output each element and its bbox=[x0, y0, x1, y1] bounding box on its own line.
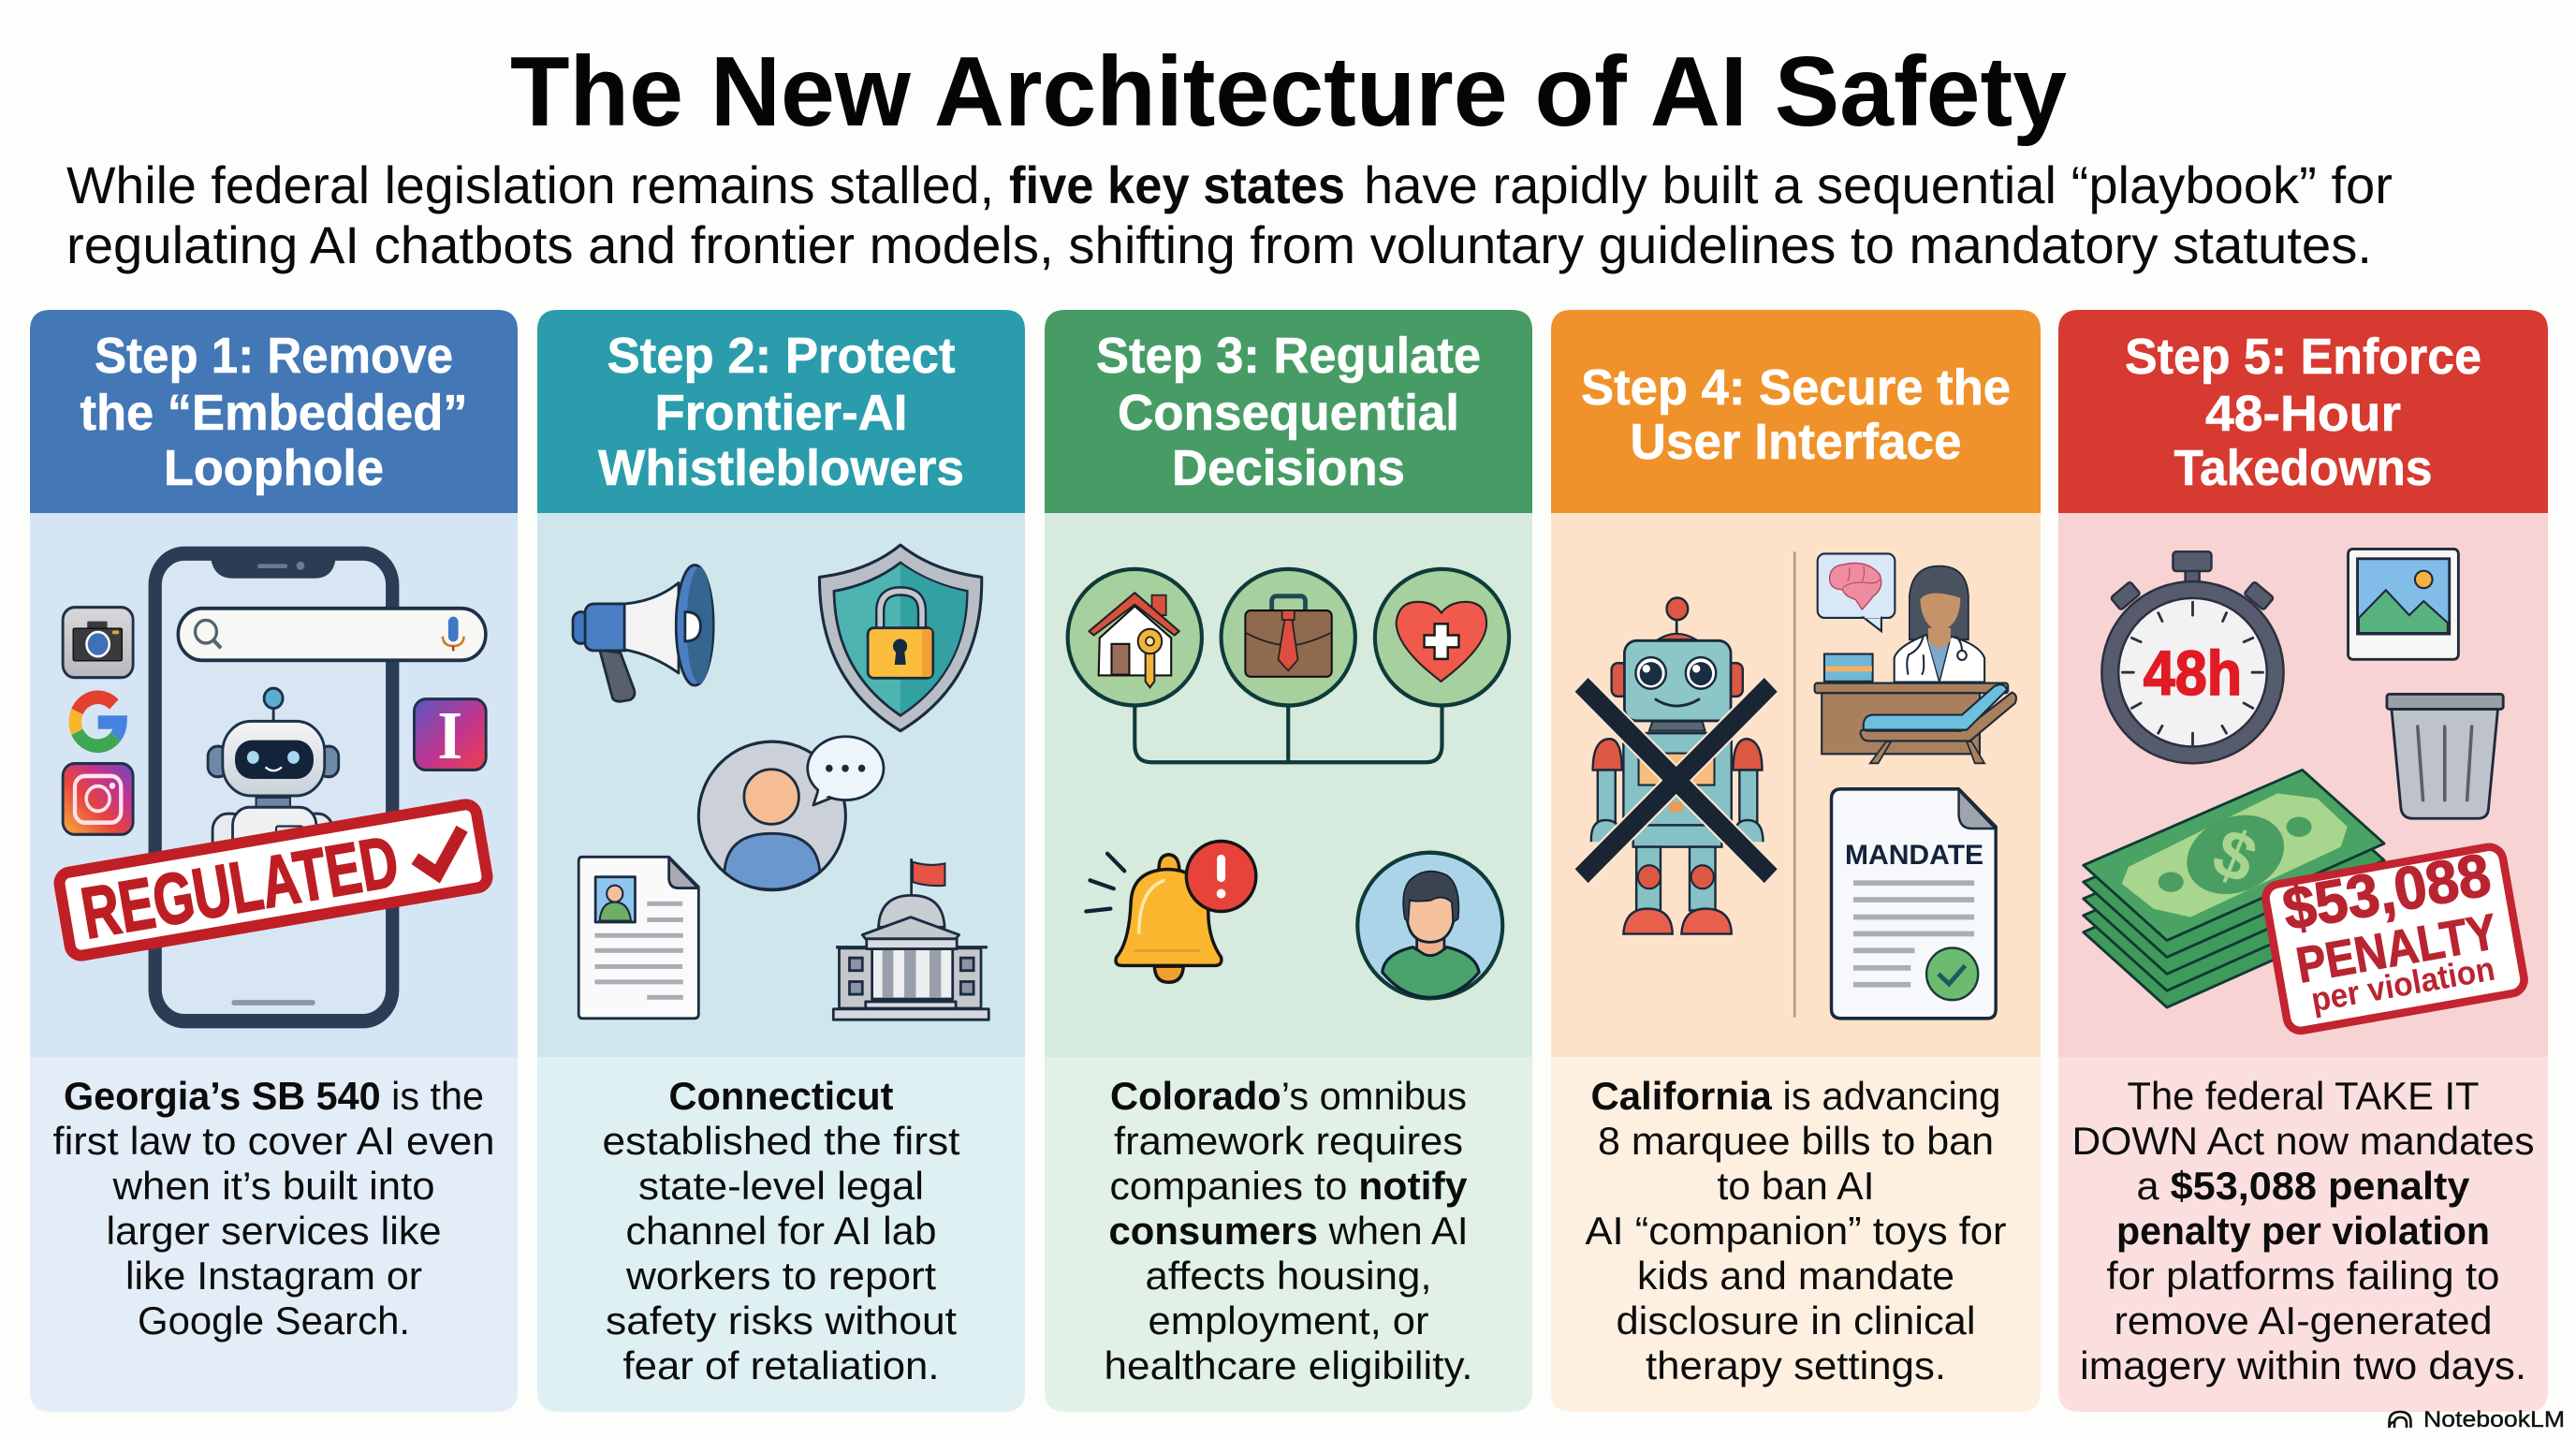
caption: step 5: imagery within two days. bbox=[2080, 1343, 2526, 1387]
caption: step 3: companies to notify bbox=[1110, 1164, 1468, 1208]
caption: step 3 bbox=[1105, 1074, 1473, 1387]
caption: step 1: first law to cover AI even bbox=[52, 1119, 494, 1163]
icon: stack of money bbox=[2084, 770, 2384, 1007]
caption: step 4: California is advancing bbox=[1591, 1074, 2001, 1118]
icon: I app: I bbox=[437, 698, 462, 773]
heading: step 3 bbox=[1096, 328, 1481, 496]
caption: step 5: penalty per violation bbox=[2116, 1209, 2490, 1253]
caption: step 2 bbox=[603, 1074, 960, 1387]
heading: step 2 bbox=[598, 328, 964, 496]
icon: shield with padlock bbox=[819, 545, 982, 731]
heading: step 1 bbox=[80, 328, 468, 496]
caption: step 1: Google Search. bbox=[138, 1299, 410, 1343]
icon: camera app bbox=[63, 608, 133, 678]
caption: step 5: a $53,088 penalty bbox=[2136, 1164, 2470, 1208]
caption: step 5: The federal TAKE IT bbox=[2127, 1074, 2479, 1118]
heading: step 5 bbox=[2125, 329, 2481, 496]
icon: document bbox=[578, 857, 698, 1019]
caption: step 2: Connecticut bbox=[668, 1074, 894, 1118]
illustration: user interface rules bbox=[1582, 551, 2016, 1019]
illustration: phone with embedded chatbot bbox=[63, 553, 486, 1021]
caption: step 2: established the first bbox=[603, 1119, 960, 1163]
caption: step 4 bbox=[1586, 1074, 2007, 1387]
icon: stack of money: $ bbox=[2203, 813, 2267, 899]
heading: step 5: Takedowns bbox=[2174, 440, 2432, 496]
subtitle: have rapidly built a sequential “playbook” for bbox=[1364, 155, 2393, 214]
panel: step 2 bbox=[537, 310, 1025, 1412]
callout: penalty tag bbox=[2262, 838, 2526, 1033]
caption: step 5: DOWN Act now mandates bbox=[2072, 1119, 2535, 1163]
icon: banned companion robot bbox=[1591, 598, 1764, 933]
panel: step 1 bbox=[30, 310, 518, 1412]
caption: step 5 bbox=[2072, 1074, 2535, 1387]
caption: step 4: therapy settings. bbox=[1646, 1343, 1946, 1387]
icon: trash can bbox=[2387, 694, 2503, 818]
panel: step 4 bbox=[1551, 310, 2041, 1412]
heading: step 3: Consequential bbox=[1118, 385, 1459, 441]
heading: step 4: User Interface bbox=[1631, 414, 1962, 470]
icon: employment bbox=[1222, 569, 1355, 706]
title: The New Architecture of AI Safety bbox=[510, 37, 2067, 147]
caption: step 3: framework requires bbox=[1114, 1119, 1463, 1163]
caption: step 1: like Instagram or bbox=[125, 1254, 422, 1298]
icon: megaphone bbox=[573, 565, 713, 701]
caption: step 2: fear of retaliation. bbox=[623, 1343, 940, 1387]
caption: step 1: larger services like bbox=[107, 1209, 442, 1253]
heading: step 3: Decisions bbox=[1172, 440, 1405, 496]
caption: step 2: safety risks without bbox=[606, 1299, 957, 1343]
icon: stopwatch: 48h bbox=[2144, 638, 2242, 709]
icon: chatbot robot bbox=[208, 688, 339, 886]
caption: step 4: 8 marquee bills to ban bbox=[1598, 1119, 1994, 1163]
panel: step 3 bbox=[1045, 310, 1532, 1412]
caption: step 5: remove AI-generated bbox=[2114, 1299, 2492, 1343]
icon: Instagram bbox=[63, 764, 133, 834]
heading: step 4: Step 4: Secure the bbox=[1581, 360, 2011, 416]
heading: step 1: Step 1: Remove bbox=[95, 328, 453, 384]
connector lines bbox=[1134, 705, 1442, 763]
heading: step 4 bbox=[1581, 360, 2011, 470]
icon: stopwatch bbox=[2101, 551, 2284, 763]
icon: mandate document bbox=[1832, 789, 1996, 1019]
icon: X over robot bbox=[1582, 684, 1771, 876]
heading: step 2: Step 2: Protect bbox=[607, 328, 956, 384]
heading: step 1: Loophole bbox=[164, 440, 384, 496]
icon: search bar bbox=[178, 609, 486, 660]
icon: whistleblower person with speech bubble bbox=[698, 737, 884, 890]
subtitle: While federal legislation remains stalled, bbox=[66, 155, 994, 214]
icon: healthcare bbox=[1375, 569, 1509, 706]
logo: NotebookLM: NotebookLM bbox=[2423, 1407, 2565, 1432]
caption: step 3: affects housing, bbox=[1146, 1254, 1432, 1298]
heading: step 2: Frontier-AI bbox=[655, 385, 908, 441]
heading: step 1: the “Embedded” bbox=[80, 385, 468, 441]
icon: Google logo bbox=[75, 697, 121, 746]
stamp: regulated: REGULATED bbox=[76, 821, 404, 954]
icon: capitol building bbox=[833, 858, 988, 1020]
caption: step 3: consumers when AI bbox=[1108, 1209, 1468, 1253]
callout: penalty tag: per violation bbox=[2308, 950, 2497, 1019]
caption: step 4: to ban AI bbox=[1717, 1164, 1874, 1208]
caption: step 3: healthcare eligibility. bbox=[1105, 1343, 1473, 1387]
heading: step 5: Step 5: Enforce bbox=[2125, 329, 2481, 385]
caption: step 4: disclosure in clinical bbox=[1616, 1299, 1975, 1343]
caption: step 4: AI “companion” toys for bbox=[1586, 1209, 2007, 1253]
caption: step 3: employment, or bbox=[1148, 1299, 1429, 1343]
caption: step 2: workers to report bbox=[625, 1254, 936, 1298]
caption: step 5: for platforms failing to bbox=[2106, 1254, 2499, 1298]
icon: therapist with brain bubble and couch bbox=[1815, 553, 2016, 763]
subtitle: five key states bbox=[1009, 155, 1345, 214]
illustration: consequential decisions bbox=[1068, 569, 1509, 998]
icon: phone bbox=[155, 553, 392, 1021]
caption: step 2: state-level legal bbox=[638, 1164, 924, 1208]
caption: step 1 bbox=[52, 1074, 494, 1343]
callout: penalty tag: PENALTY bbox=[2292, 904, 2501, 994]
icon: I app bbox=[414, 698, 486, 773]
illustration: whistleblower protection bbox=[573, 545, 988, 1020]
icon: mandate document: MANDATE bbox=[1845, 840, 1983, 871]
caption: step 4: kids and mandate bbox=[1637, 1254, 1954, 1298]
caption: step 1: when it’s built into bbox=[111, 1164, 435, 1208]
callout: penalty tag: $53,088 bbox=[2278, 841, 2496, 943]
divider bbox=[1791, 551, 1798, 1018]
caption: step 2: channel for AI lab bbox=[625, 1209, 936, 1253]
panel: step 5 bbox=[2058, 310, 2548, 1412]
heading: step 2: Whistleblowers bbox=[598, 440, 964, 496]
icon: housing bbox=[1068, 569, 1202, 706]
caption: step 1: Georgia’s SB 540 is the bbox=[64, 1074, 484, 1118]
subtitle: regulating AI chatbots and frontier models, shifting from voluntary guidelines to mandatory statutes. bbox=[66, 215, 2372, 274]
heading: step 3: Step 3: Regulate bbox=[1096, 328, 1481, 384]
caption: step 3: Colorado’s omnibus bbox=[1110, 1074, 1467, 1118]
illustration: takedown enforcement bbox=[2084, 549, 2526, 1033]
icon: notification bell bbox=[1086, 842, 1256, 982]
icon: consumer bbox=[1357, 853, 1502, 998]
icon: AI-generated image bbox=[2349, 549, 2458, 659]
heading: step 5: 48-Hour bbox=[2205, 386, 2401, 442]
subtitle bbox=[66, 155, 2393, 274]
